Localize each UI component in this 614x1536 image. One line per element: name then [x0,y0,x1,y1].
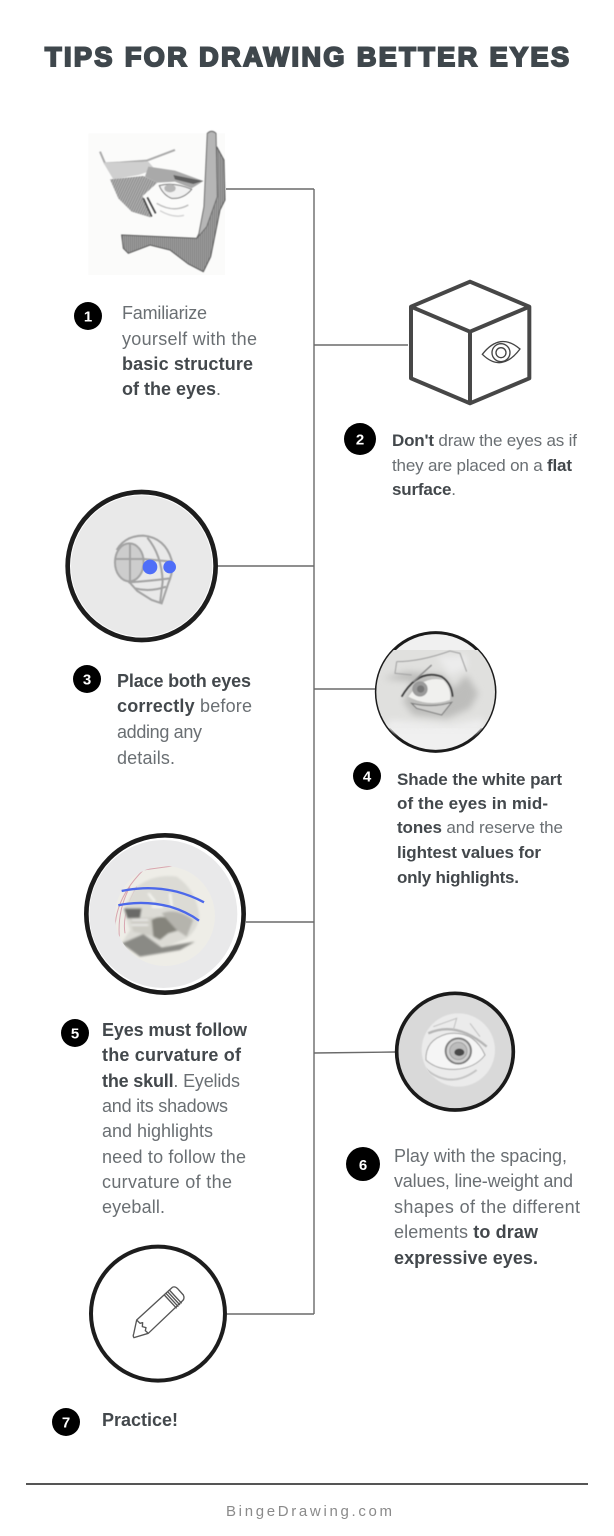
illustration: shaded eye sketch [370,633,503,751]
illustration: expressive eye sketch [397,993,513,1110]
text 1: yourself with the [122,329,257,349]
title: TIPS FOR DRAWING BETTER EYES [45,42,569,72]
text 4: Shade the white part [397,770,562,789]
text 3: correctly before [117,696,252,716]
badge 3: 3 [83,672,91,688]
step 6 [346,1146,580,1268]
text 6: Play with the spacing, [394,1146,567,1166]
text 5: curvature of the [102,1172,232,1192]
step 4 [353,762,563,887]
badge 4 [353,762,381,790]
text 6 [394,1146,580,1268]
badge 2 [344,423,376,455]
text 5 [102,1020,248,1217]
badge 6: 6 [359,1157,367,1174]
badge 4: 4 [363,768,372,786]
text 2 [392,431,577,499]
illustration: head with eye dots [68,492,216,640]
text 1: basic structure [122,354,253,374]
text 2: surface. [392,480,456,499]
text 4: of the eyes in mid- [397,794,548,813]
step 3 [73,665,252,768]
step 7 [52,1408,178,1436]
text 7: Practice! [102,1410,178,1430]
text 5: the skull. Eyelids [102,1071,240,1091]
text 5: the curvature of [102,1045,242,1065]
step 2 [344,423,577,499]
text 2: they are placed on a flat [392,456,572,475]
text 5: Eyes must follow [102,1020,248,1040]
text 5: eyeball. [102,1197,165,1217]
badge 3 [73,665,101,693]
text 5: and its shadows [102,1096,228,1116]
text 5: need to follow the [102,1147,246,1167]
step 1 [74,302,257,399]
badge 1 [74,302,102,330]
text 6: elements to draw [394,1222,539,1242]
text 4: lightest values for [397,843,541,862]
icon: cube with eye [411,282,529,403]
badge 7: 7 [62,1414,70,1432]
text 6: values, line-weight and [394,1171,573,1191]
badge 2: 2 [356,432,364,448]
text 3: details. [117,748,175,768]
step 5 [61,1019,248,1217]
text 3: adding any [117,722,202,742]
text 4: tones and reserve the [397,818,563,837]
icon: pencil in circle [91,1247,225,1381]
connector lines [217,189,408,1314]
badge 6 [346,1147,380,1181]
text 1: Familiarize [122,303,207,323]
text 2: Don't draw the eyes as if [392,431,577,450]
text 6: expressive eyes. [394,1248,538,1268]
badge 1: 1 [84,308,92,326]
badge 5 [61,1019,89,1047]
text 4: only highlights. [397,868,519,887]
text 4 [397,770,563,887]
illustration: skull with curved guide lines [86,835,244,993]
text 5: and highlights [102,1121,213,1141]
badge 5: 5 [71,1026,79,1042]
text 1: of the eyes. [122,379,221,399]
text 3: Place both eyes [117,671,251,691]
text 1 [122,303,257,399]
illustration: sketched eye structure block [88,131,225,275]
text 6: shapes of the different [394,1197,580,1217]
footer: BingeDrawing.com [226,1503,392,1520]
text 3 [117,671,252,768]
